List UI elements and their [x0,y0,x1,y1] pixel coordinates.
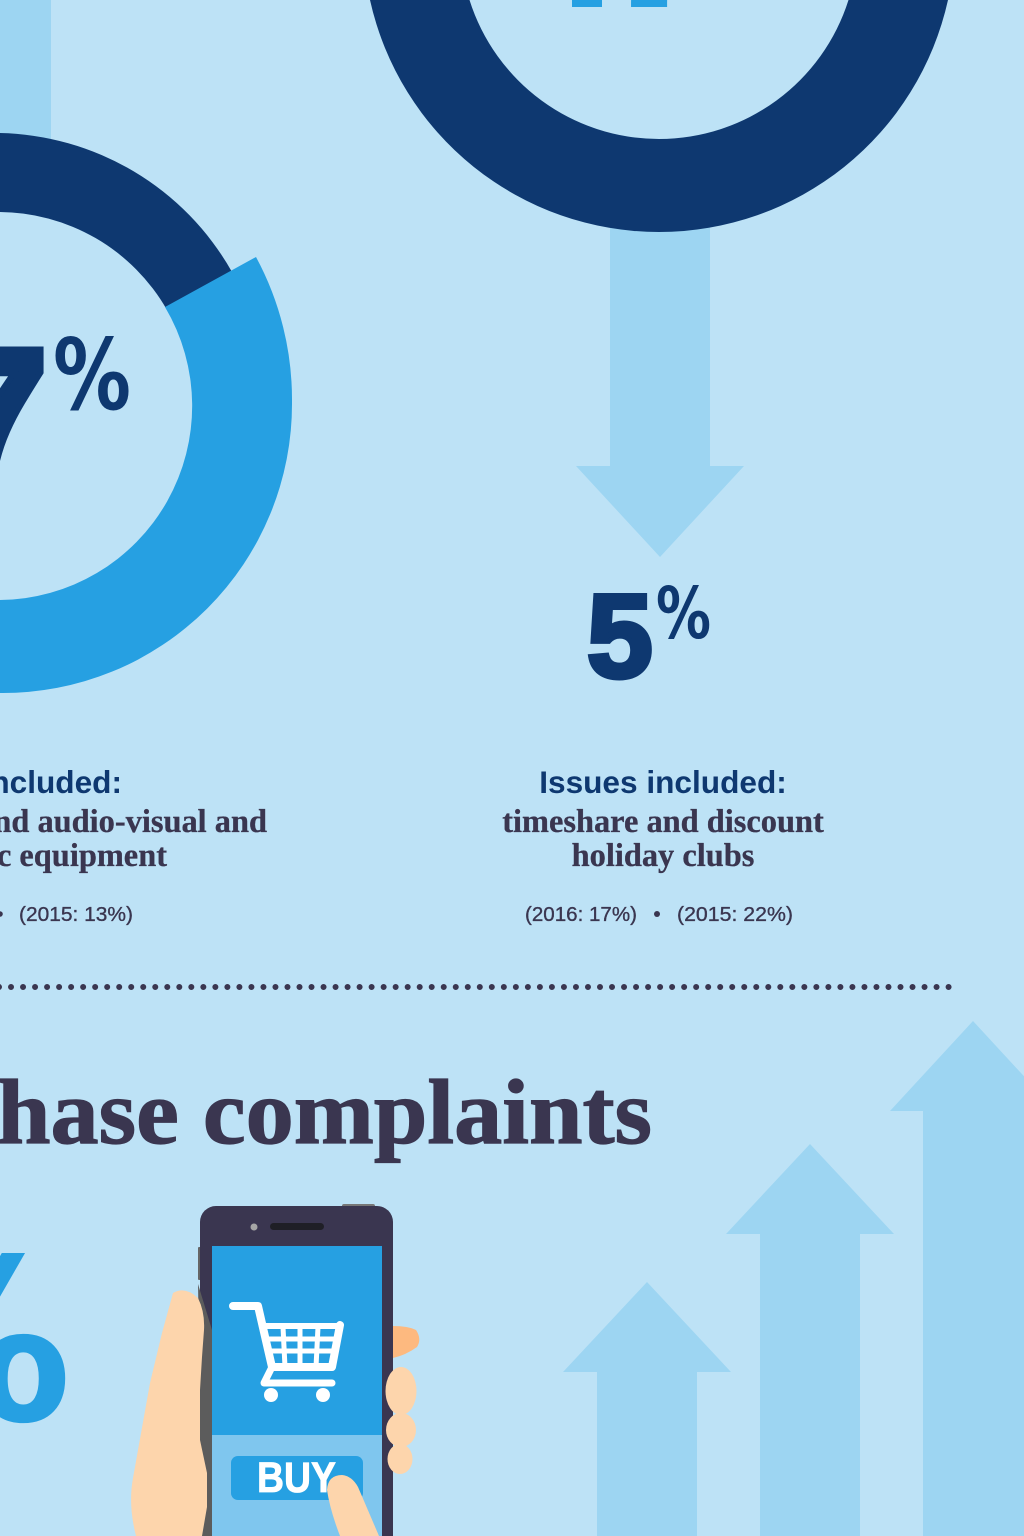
donut value: left [0,304,131,539]
arrow: left connector bar [0,0,51,142]
buy button [231,1454,363,1502]
hand: fingers [386,1326,419,1474]
text block: right issues [502,764,824,926]
arrow: down [576,225,744,557]
icon: hand holding phone [131,1204,419,1536]
value: 5 percent: % [656,572,711,655]
text block: right issues: (2015: 22%) [677,903,793,926]
text block: left issues [0,764,267,926]
hand: palm and thumb [131,1290,207,1536]
phone body [198,1204,393,1536]
icon: shopping cart [233,1306,340,1402]
text block: left issues: (2015: 13%) [19,903,133,926]
text block: right issues: timeshare and discount [502,804,824,840]
hand: pointing finger [327,1475,379,1536]
value: 5 percent [587,571,711,703]
donut value: left: % [53,319,131,433]
text block: left issues: c equipment [0,838,167,874]
arrows: rising up [563,1021,1024,1536]
heading: hase complaints [0,1061,652,1163]
text block: right issues: (2016: 17%) [525,903,637,926]
text block: right issues: holiday clubs [572,838,754,874]
phone screen [212,1246,382,1536]
buy button: BUY [257,1454,336,1502]
donut chart: left [0,133,292,693]
value: 5 percent: 5 [587,571,653,703]
text block: right issues: Issues included: [539,764,787,800]
text block: left issues: nd audio-visual and [0,804,267,840]
donut chart: right [370,0,948,232]
